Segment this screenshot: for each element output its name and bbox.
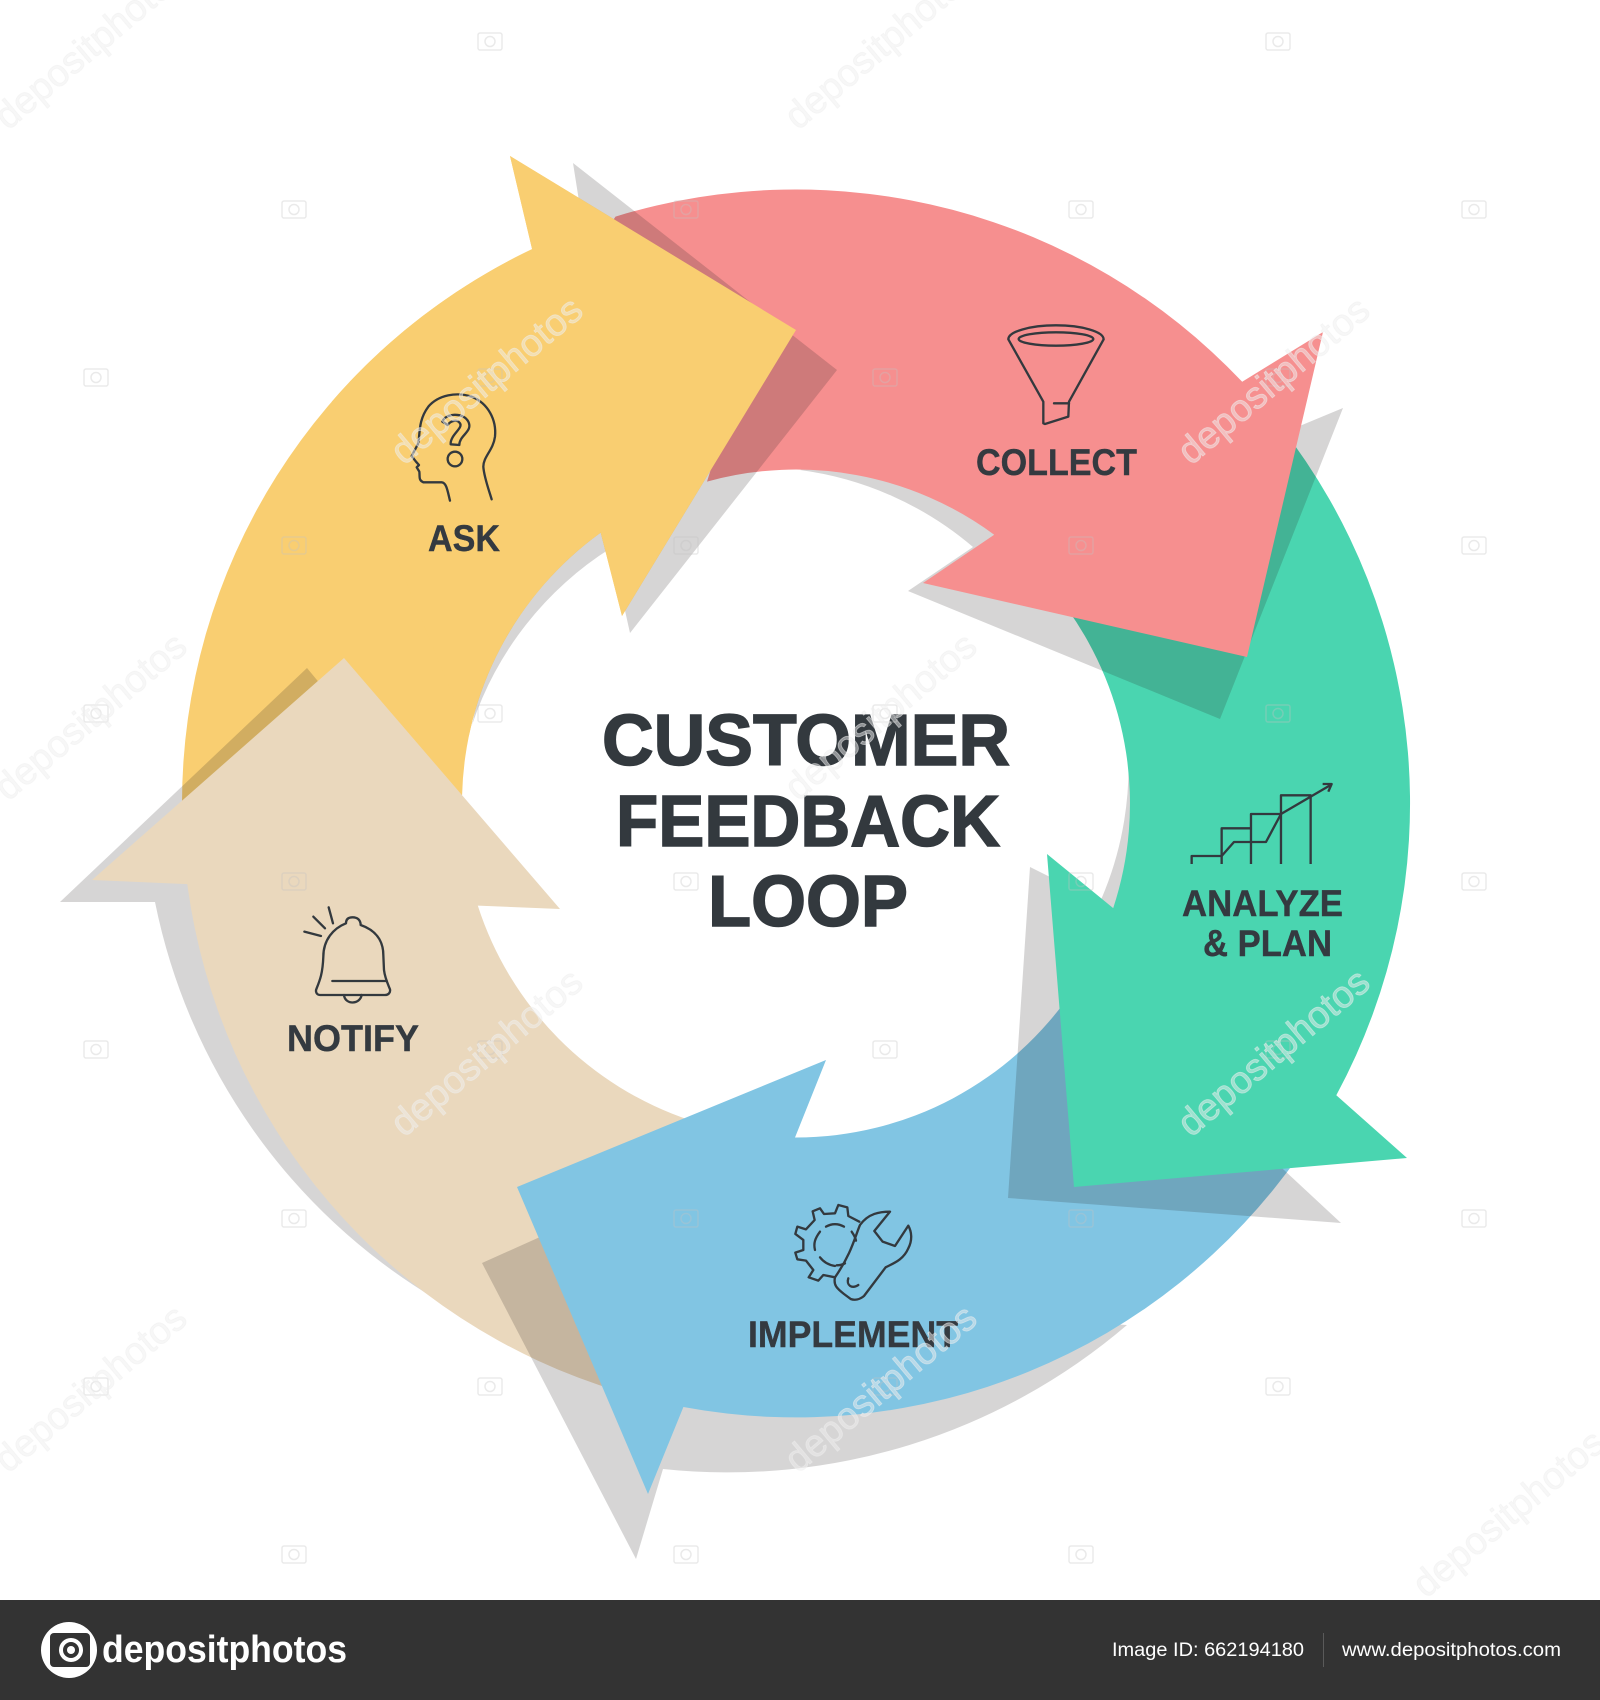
arrow: notify — [92, 658, 690, 1392]
footer bar — [0, 1600, 1600, 1700]
label: analyze and plan — [1182, 883, 1343, 964]
arrow head: ask — [332, 156, 796, 735]
icon: rising chart — [1192, 784, 1332, 864]
label: analyze and plan: & PLAN — [1203, 923, 1332, 964]
arrow: ask — [182, 156, 796, 805]
icon: depositphotos camera logo — [41, 1622, 97, 1678]
label: notify: NOTIFY — [287, 1018, 419, 1059]
footer logo text: depositphotos — [102, 1629, 347, 1671]
label: collect: COLLECT — [976, 442, 1137, 483]
label: analyze and plan: ANALYZE — [1182, 883, 1343, 924]
shadow: implement arrow — [482, 1228, 1127, 1559]
title — [602, 701, 1010, 942]
icon: head with question mark — [412, 394, 495, 501]
watermark: depositphotos text: depositphotos — [383, 961, 591, 1145]
watermark: depositphotos text: depositphotos — [1170, 289, 1378, 473]
shadow: notify arrow — [60, 668, 520, 1298]
arrow: collect — [610, 189, 1323, 657]
footer website: www.depositphotos.com — [1341, 1640, 1561, 1661]
title: CUSTOMER — [602, 701, 1010, 781]
footer image id: Image ID: 662194180 — [1112, 1640, 1304, 1661]
shadow: ask arrow — [472, 163, 837, 725]
title: LOOP — [708, 862, 908, 942]
icon: bell — [304, 907, 390, 1002]
arrow: implement — [517, 989, 1300, 1494]
watermark: depositphotos text: depositphotos — [777, 1297, 985, 1481]
title: FEEDBACK — [616, 782, 1000, 862]
icon: funnel — [1008, 325, 1104, 424]
watermark: depositphotos text: depositphotos — [383, 289, 591, 473]
watermark: depositphotos text: depositphotos — [777, 625, 985, 809]
arrow: analyze and plan — [1047, 425, 1410, 1187]
icon: gear and wrench — [795, 1205, 911, 1300]
watermark: camera marks — [84, 33, 1486, 1563]
shadow: collect arrow — [800, 408, 1343, 719]
label: ask: ASK — [428, 518, 500, 559]
shadow: analyze and plan arrow — [1008, 735, 1341, 1223]
watermark: depositphotos text: depositphotos — [1170, 961, 1378, 1145]
label: implement: IMPLEMENT — [748, 1314, 958, 1355]
